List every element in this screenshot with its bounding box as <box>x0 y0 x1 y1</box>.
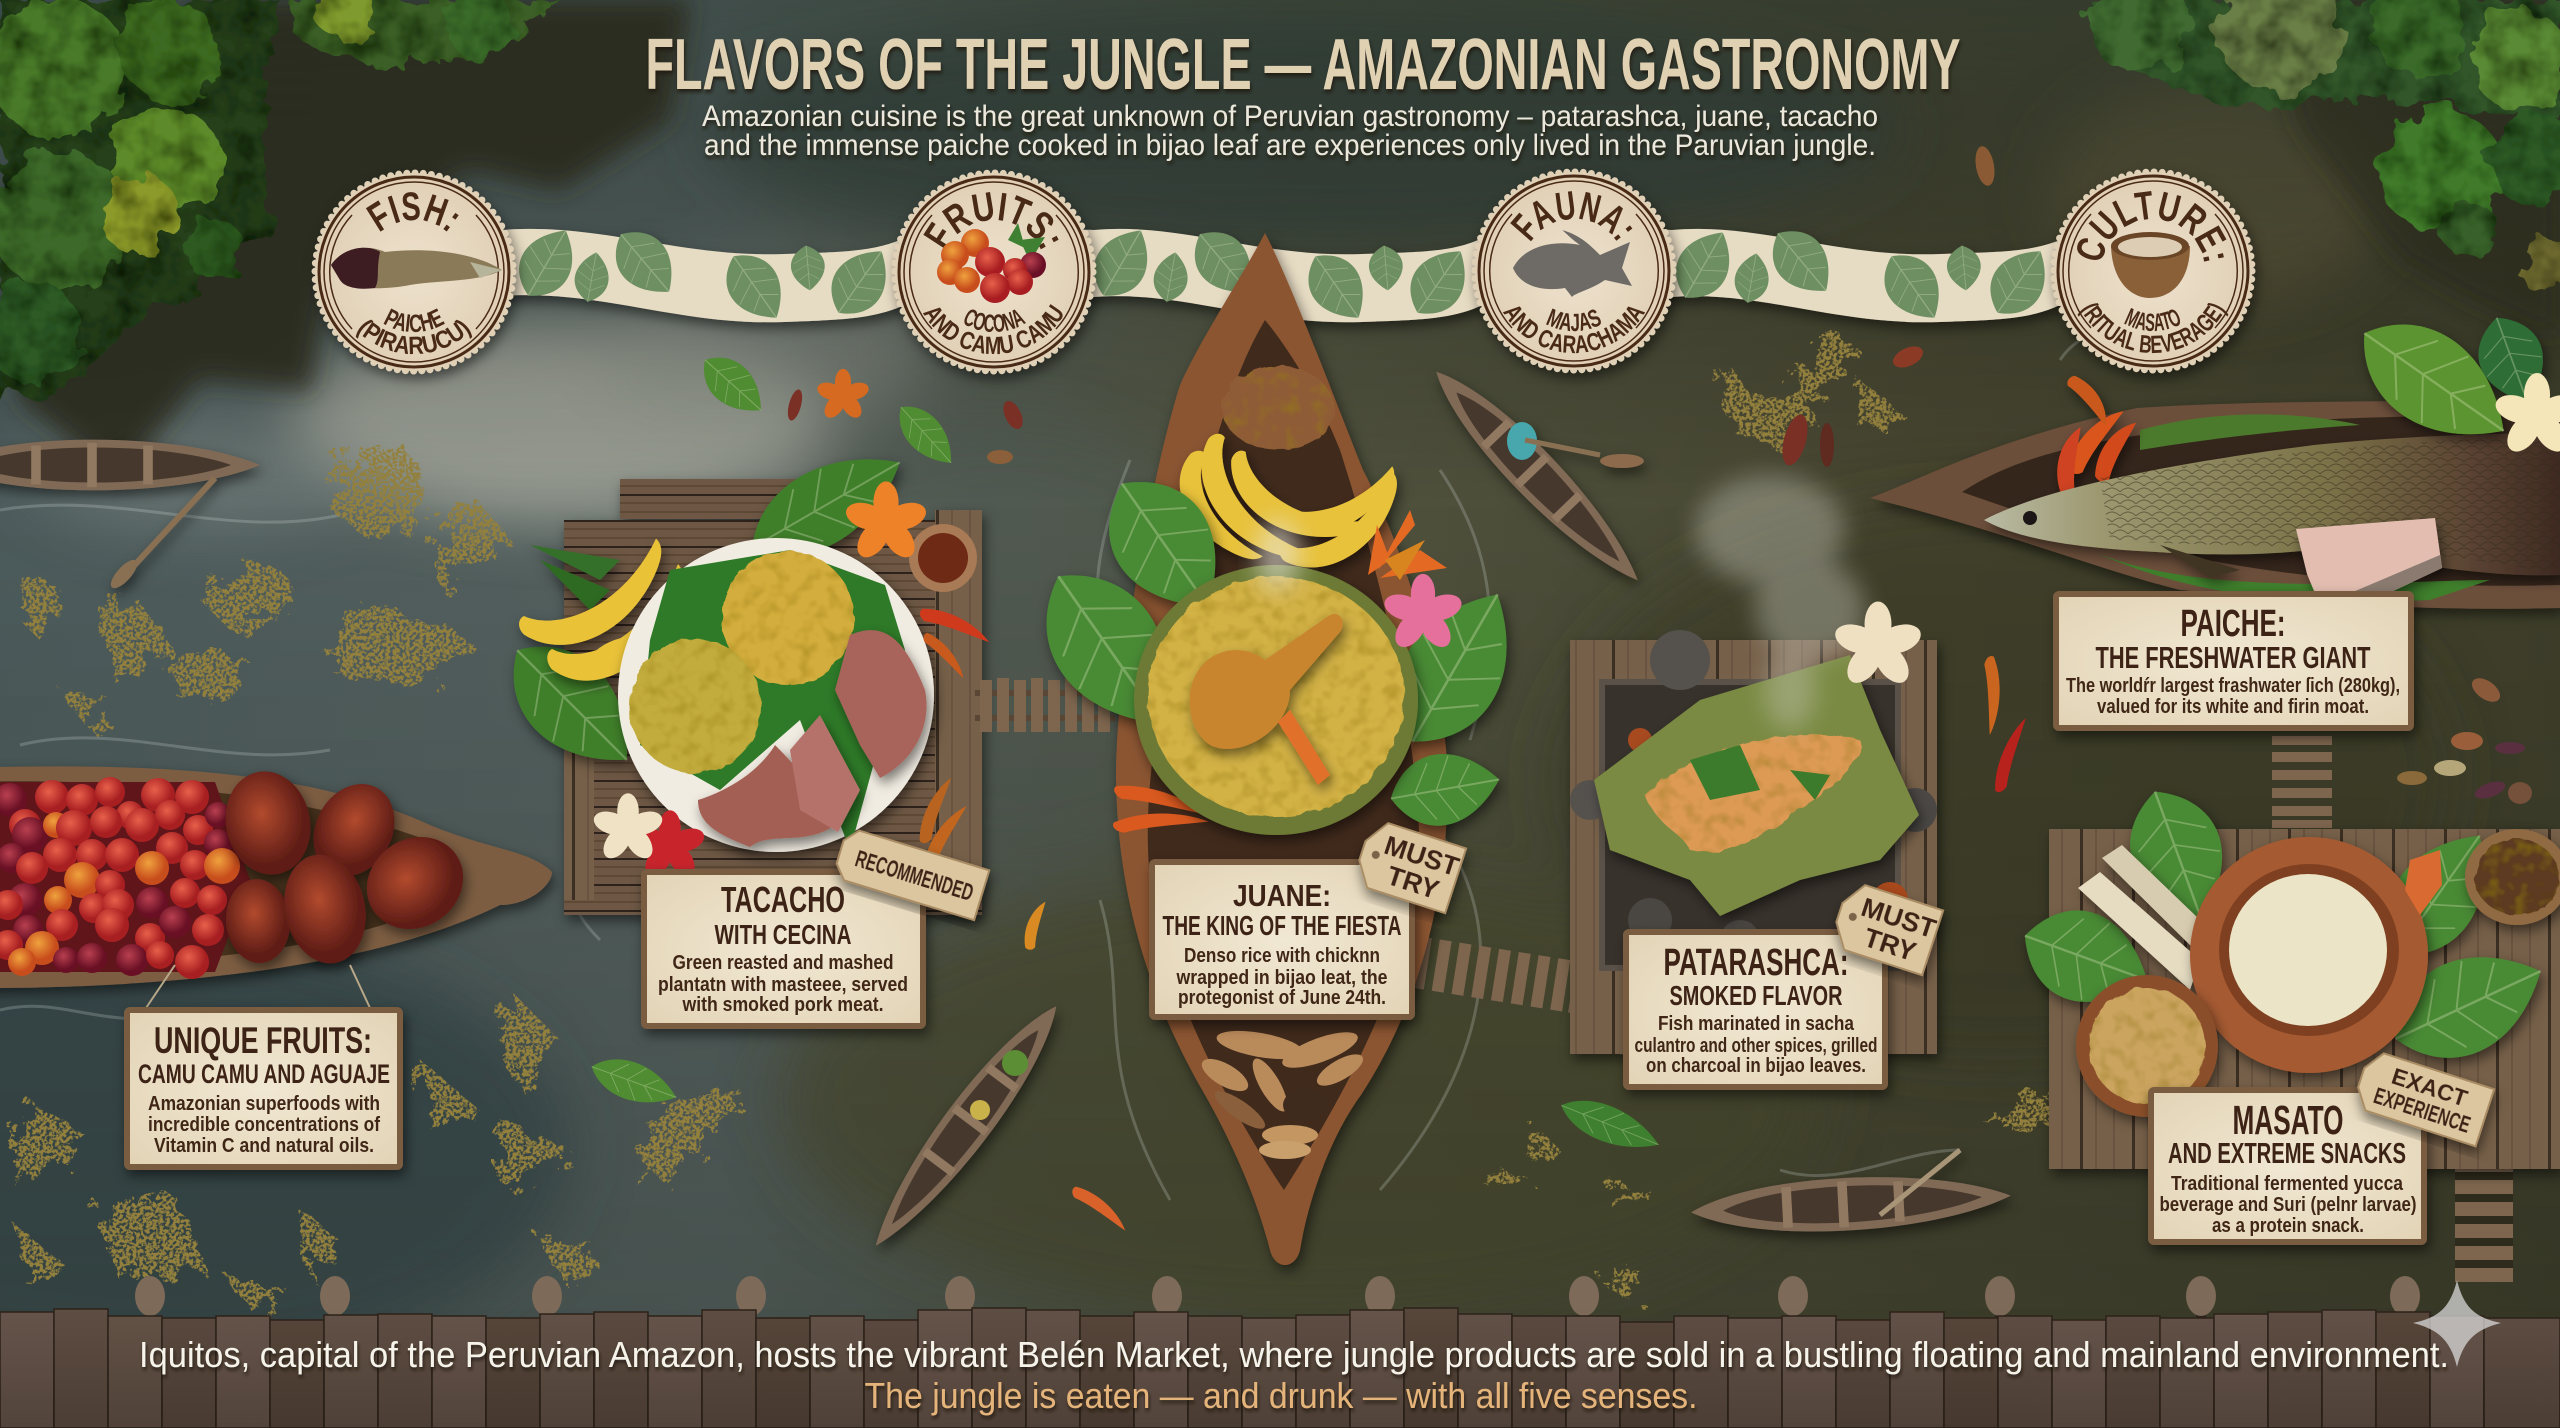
icon: carachama fish <box>1513 230 1632 297</box>
tag: recommended <box>833 827 989 920</box>
intro text <box>702 100 1878 162</box>
body: juane <box>1176 945 1388 1009</box>
body: masato: beverage and Suri (pelnr larvae) <box>2160 1194 2416 1216</box>
small bowl <box>2465 829 2560 925</box>
pink flower <box>1381 574 1465 653</box>
leaf ribbon <box>500 217 2061 332</box>
heading: paiche: PAICHE: <box>2180 603 2286 645</box>
heading: unique fruits: UNIQUE FRUITS: <box>154 1020 372 1061</box>
body: masato: Traditional fermented yucca <box>2171 1173 2404 1195</box>
water ripples <box>0 326 2160 1200</box>
small canoe: with turquoise bowl <box>1419 355 1655 597</box>
heading: patarashca: PATARASHCA: <box>1664 942 1848 984</box>
heading: fauna: FAUNA: <box>1510 191 1632 242</box>
tacacho ball 2 <box>629 639 761 773</box>
bridge: juane to patarashca <box>1412 936 1588 1014</box>
spice bowl <box>909 524 977 592</box>
body: patarashca <box>1634 1013 1878 1077</box>
tag: recommended: RECOMMENDED <box>852 845 977 907</box>
carrots <box>1112 772 1209 841</box>
subheading: smoked flavor: SMOKED FLAVOR <box>1670 980 1842 1011</box>
bridge: tacacho to juane <box>975 678 1115 732</box>
platform: patarashca grill <box>1570 475 1937 1054</box>
body: tacacho: with smoked pork meat. <box>682 994 884 1016</box>
card: patarashca <box>1626 932 1885 1087</box>
body: patarashca: on charcoal in bijao leaves. <box>1646 1055 1866 1077</box>
body: paiche: valued for its white and firin moat. <box>2097 696 2369 718</box>
heading: culture: CULTURE: <box>2077 191 2226 262</box>
cocoa beans and chilies <box>1778 145 2532 804</box>
card: unique fruits <box>127 1010 400 1167</box>
wooden dock fence <box>0 1308 2560 1428</box>
footer text: The jungle is eaten — and drunk — with all five senses. <box>864 1375 1698 1416</box>
leaves: masato <box>2010 776 2560 1081</box>
body: juane: protegonist of June 24th. <box>1178 987 1386 1009</box>
chilies and vegetables <box>2043 370 2153 498</box>
footer text <box>139 1334 2449 1416</box>
icon: masato cup <box>2111 232 2190 298</box>
medallion: fish <box>312 170 526 386</box>
subheading: camu camu and aguaje: CAMU CAMU AND AGUAJE <box>138 1059 390 1089</box>
bananas <box>519 538 683 681</box>
banana leaf on plate <box>640 550 905 850</box>
body: paiche: The worldŕr largest frashwater ſich (280kg), <box>2066 675 2400 697</box>
red berries: camu camu <box>0 777 250 979</box>
body: superfoods: Amazonian superfoods with <box>148 1093 380 1115</box>
bijao leaf package <box>1594 655 1919 916</box>
body: tacacho: plantatn with masteee, served <box>658 974 908 996</box>
floating leaves and petals <box>585 345 1665 1242</box>
subheading: freshwater giant: THE FRESHWATER GIANT <box>2096 640 2371 675</box>
body: juane: Denso rice with chicknn <box>1184 945 1380 967</box>
tag: must try, patarashca <box>1829 880 1943 975</box>
smoked pork cecina <box>698 630 927 847</box>
intro text: Amazonian cuisine is the great unknown of Peruvian gastronomy – patarashca, juane, tacacho <box>702 100 1878 133</box>
orange flower: masato <box>2405 850 2442 915</box>
label: masato: MASATO <box>2124 308 2180 332</box>
body: paiche <box>2066 675 2400 718</box>
body: masato <box>2160 1173 2416 1237</box>
icon: sparkle watermark <box>2413 1280 2501 1367</box>
label: paiche: PAICHE <box>384 308 445 332</box>
body: superfoods: Vitamin C and natural oils. <box>154 1135 374 1157</box>
smoke <box>1695 475 1865 730</box>
bird of paradise flower <box>1368 510 1447 580</box>
coals and grate <box>1570 630 1937 970</box>
seeds: bottom of boat <box>1197 1025 1368 1159</box>
tacacho ball 1 <box>722 551 854 685</box>
tree canopy: top right <box>2090 0 2560 293</box>
strings: sign hangers <box>146 965 370 1008</box>
heading: masato: MASATO <box>2232 1097 2344 1143</box>
floating debris patches <box>10 330 2060 1310</box>
label: majas: MAJAS <box>1546 308 1601 332</box>
subheading: with cecina: WITH CECINA <box>714 919 852 950</box>
body: superfoods: incredible concentrations of <box>148 1114 380 1136</box>
yucca sticks <box>2078 845 2200 990</box>
paiche fillet <box>2296 518 2442 622</box>
small canoe: bottom right <box>1690 1150 2012 1239</box>
leaf under fish <box>2090 550 2490 602</box>
tag: must try, patarashca: TRY <box>1860 922 1920 967</box>
central carved boat <box>1015 233 1540 1265</box>
body: tacacho <box>658 952 908 1016</box>
paiche boat <box>1870 296 2560 622</box>
tag: exact experience: EXACT <box>2389 1063 2471 1112</box>
dock posts <box>135 1276 2420 1320</box>
juane rice ball <box>1148 577 1404 817</box>
bridge: masato to dock <box>2455 1155 2513 1282</box>
label: pirarucu: (PIRARUCU) <box>356 320 472 354</box>
label: cocona: COCONA <box>964 310 1026 332</box>
tag: exact experience: EXPERIENCE <box>2371 1082 2474 1138</box>
tag: must try, juane: MUST <box>1381 830 1463 882</box>
body: tacacho: Green reasted and mashed <box>672 952 894 974</box>
tag: must try, juane: TRY <box>1383 860 1443 905</box>
label: and carachama: AND CARACHAMA <box>1503 306 1645 354</box>
body: masato: as a protein snack. <box>2212 1215 2364 1237</box>
platform: tacacho raft <box>487 430 991 915</box>
body: superfoods <box>148 1093 380 1157</box>
small canoe: top left <box>0 440 260 592</box>
card: tacacho with cecina <box>644 872 923 1026</box>
heading: fish: FISH: <box>366 192 459 232</box>
icon: paiche fish <box>331 248 502 289</box>
medallion: fauna <box>1467 168 1686 382</box>
nuts: top of boat <box>1222 366 1334 450</box>
frangipani: top right <box>2492 373 2560 458</box>
frangipani flower <box>1831 602 1925 689</box>
leaves: tacacho <box>487 430 918 790</box>
plate <box>618 538 934 852</box>
body: patarashca: Fish marinated in sacha <box>1658 1013 1855 1035</box>
footer text: Iquitos, capital of the Peruvian Amazon, hosts the vibrant Belén Market, where jungle products are sold in a bustling floating and mainland environment. <box>139 1334 2449 1375</box>
steam: juane <box>1256 519 1300 591</box>
tree reflections <box>0 0 2560 480</box>
leaves: top right <box>2339 296 2557 468</box>
flowers and chilies <box>591 481 991 880</box>
tag: must try, patarashca: MUST <box>1858 892 1940 944</box>
body: juane: wrapped in bijao leat, the <box>1176 967 1388 989</box>
label: and camu camu: AND CAMU CAMU <box>923 304 1063 354</box>
body: patarashca: culantro and other spices, grilled <box>1634 1035 1878 1057</box>
label: ritual beverage: (RITUAL BEVERAGE) <box>2078 303 2228 354</box>
juane wrap <box>1134 565 1418 835</box>
clay bowl of masato <box>2190 837 2428 1073</box>
fruit boat <box>0 763 552 1008</box>
heading: tacacho: TACACHO <box>721 879 845 920</box>
small canoe: lower middle <box>857 992 1075 1260</box>
card: juane <box>1152 862 1412 1017</box>
platform: masato raft <box>2010 776 2560 1169</box>
heading: juane: JUANE: <box>1233 878 1331 913</box>
aguaje fruits <box>216 763 481 971</box>
tree canopy: top left <box>0 0 560 400</box>
heading: fruits: FRUITS: <box>923 192 1059 250</box>
card: masato <box>2151 1090 2424 1242</box>
icon: fruit cluster <box>937 223 1046 303</box>
leaves: juane <box>1015 456 1540 834</box>
card: paiche <box>2056 594 2411 728</box>
intro text: and the immense paiche cooked in bijao leaf are experiences only lived in the Paruvian jungle. <box>704 129 1876 162</box>
subheading: king of the fiesta: THE KING OF THE FIESTA <box>1162 910 1402 941</box>
suri snack bowl <box>2076 975 2218 1117</box>
tag: must try, juane <box>1352 818 1466 913</box>
subheading: extreme snacks: AND EXTREME SNACKS <box>2168 1138 2406 1170</box>
medallion: culture <box>2054 172 2252 370</box>
medallion: fruits <box>887 170 1106 384</box>
ribbon leaves <box>506 217 2061 332</box>
arapaima fish <box>1984 433 2560 578</box>
bananas: juane boat <box>1173 413 1404 573</box>
tag: exact experience <box>2352 1049 2494 1146</box>
chicken drumstick <box>1190 614 1343 785</box>
grilled fish <box>1645 735 1861 853</box>
bridge: paiche to masato <box>2272 736 2332 828</box>
